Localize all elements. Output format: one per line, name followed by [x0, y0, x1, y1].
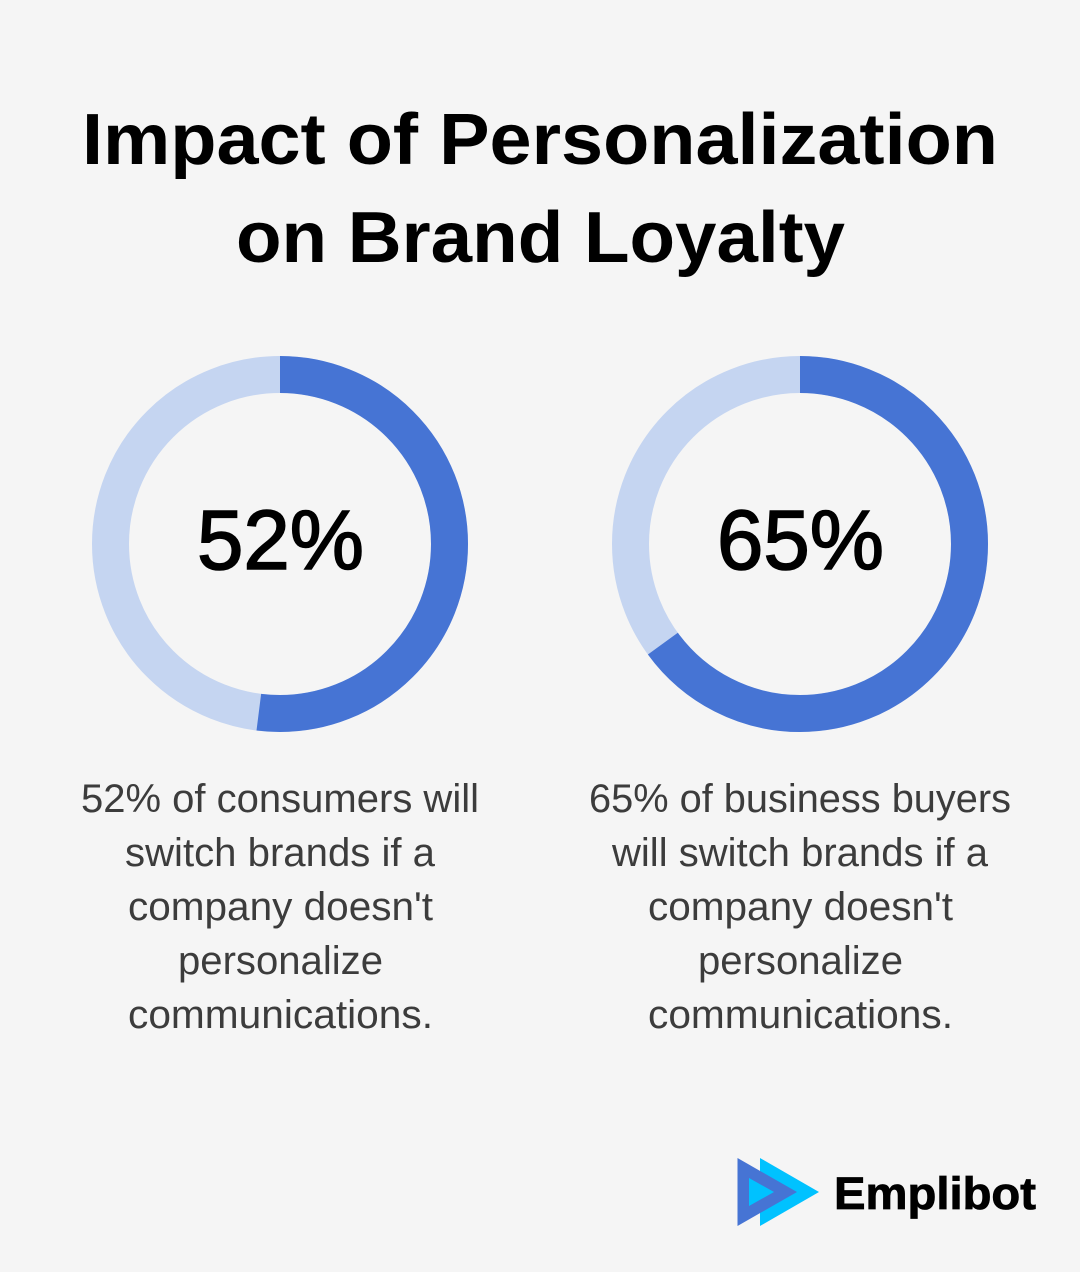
donut chart: 52% — [110, 374, 450, 714]
description: consumers: 52% of consumers will — [81, 777, 479, 821]
description: business buyers: communications. — [648, 993, 953, 1037]
panel: 65% business buyers — [589, 374, 1011, 1037]
value: 52%: 52% — [197, 493, 364, 587]
icon: play triangles — [738, 1158, 819, 1226]
logo wordmark: Emplibot — [834, 1168, 1036, 1219]
description: business buyers: will switch brands if a — [611, 831, 989, 875]
description: consumers: company doesn't — [128, 885, 433, 929]
description: business buyers: company doesn't — [648, 885, 953, 929]
title: on Brand Loyalty — [236, 198, 845, 278]
panel: 52% consumers — [81, 374, 479, 1037]
donut chart: 65% — [630, 374, 970, 714]
description: consumers — [81, 777, 479, 1037]
description: business buyers: personalize — [698, 939, 903, 983]
logo: Emplibot — [738, 1158, 1036, 1226]
description: business buyers — [589, 777, 1011, 1037]
description: consumers: personalize — [178, 939, 383, 983]
description: consumers: communications. — [128, 993, 433, 1037]
title: Impact of Personalization — [82, 100, 998, 180]
value: 65%: 65% — [717, 493, 884, 587]
title — [82, 100, 998, 278]
description: business buyers: 65% of business buyers — [589, 777, 1011, 821]
description: consumers: switch brands if a — [125, 831, 436, 875]
